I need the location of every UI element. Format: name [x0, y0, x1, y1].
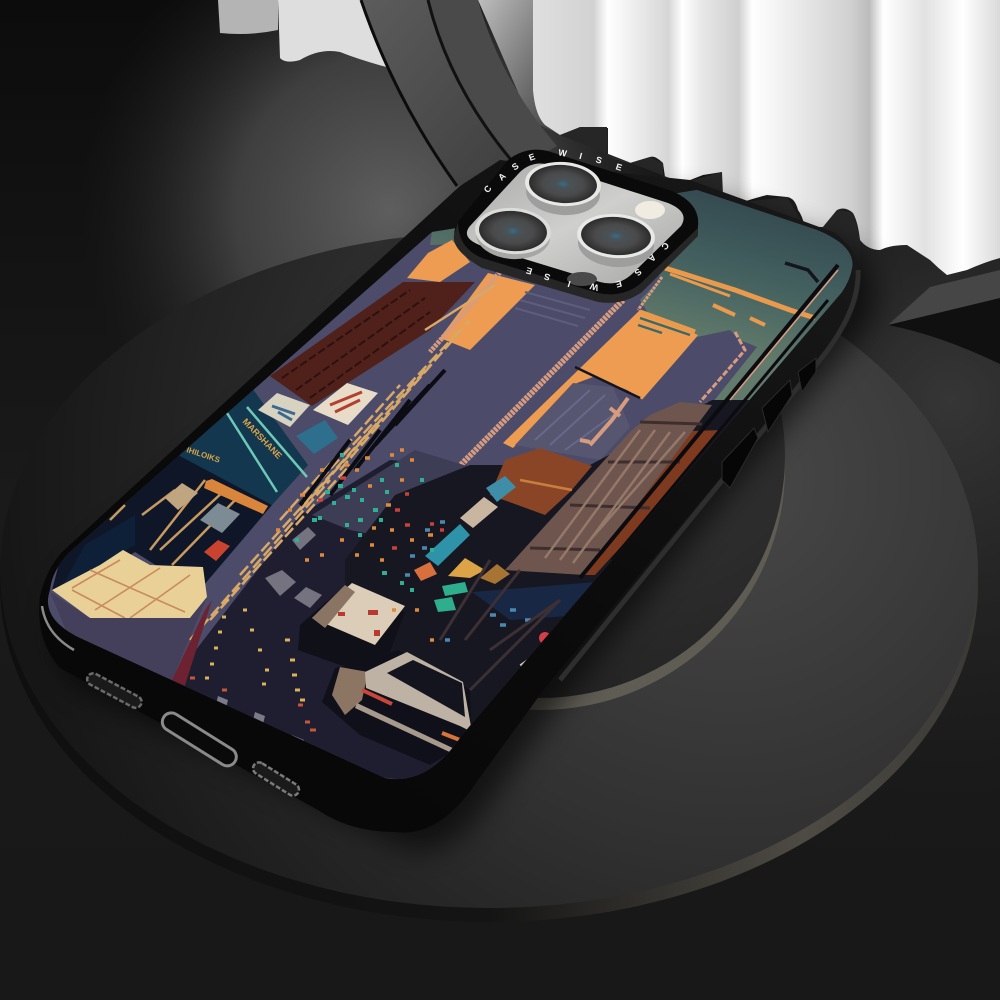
brand text: top: C — [482, 183, 494, 195]
bokeh lights: orange — [276, 450, 434, 640]
navy awning — [472, 582, 596, 620]
sedan — [322, 650, 472, 765]
brand text: top: E — [527, 151, 537, 163]
storefront — [52, 452, 272, 592]
brand text: top: E — [615, 278, 623, 290]
brand text: top: I — [578, 151, 583, 161]
stand foot right — [888, 270, 1000, 364]
orange sky slices — [407, 240, 698, 448]
sensor — [567, 272, 597, 286]
figure — [64, 515, 135, 584]
tower facade lines — [515, 292, 590, 326]
street — [184, 460, 468, 779]
brand text: top: W — [588, 281, 600, 293]
pink tower stripes — [430, 272, 662, 476]
blue store facade — [176, 388, 308, 505]
road markers — [205, 600, 305, 700]
bottom ports — [85, 671, 301, 798]
case artwork: pixel city street — [48, 190, 852, 780]
brand text: top: A — [496, 171, 508, 183]
store names: MARSHANE — [241, 416, 284, 461]
lens: right — [576, 211, 656, 270]
curtain: small left panel — [218, 0, 390, 68]
brand text: top: S — [510, 161, 521, 172]
brand text: top: A — [646, 252, 658, 264]
camera surround — [454, 147, 698, 303]
phone shadow — [53, 196, 874, 851]
van — [298, 583, 405, 665]
lens: left — [473, 205, 553, 262]
small tower — [515, 383, 630, 460]
brand text: top: E — [525, 265, 533, 277]
distant cars — [265, 527, 322, 608]
dark scallops behind phone — [560, 127, 860, 300]
rust building — [490, 448, 592, 515]
tan shop frames — [110, 480, 240, 565]
curtain: main right panel — [478, 0, 1000, 275]
bokeh lights: red — [318, 478, 444, 548]
flash — [635, 201, 665, 219]
brick building — [270, 282, 475, 406]
street lamp — [785, 263, 818, 282]
poles — [580, 265, 838, 578]
small disk — [295, 214, 785, 710]
lamp on tower — [575, 367, 640, 398]
paper signs — [258, 383, 378, 454]
right side buildings — [345, 400, 750, 724]
phone case body — [39, 160, 860, 833]
brand text: top: S — [543, 271, 551, 283]
brand text: top: S — [595, 154, 603, 166]
orange clouds — [640, 268, 815, 332]
bokeh lights: blue — [405, 522, 531, 640]
dark building lines — [440, 560, 570, 690]
brand text: top: C — [659, 240, 671, 252]
brand text: top: W — [557, 147, 568, 159]
brand text: top: I — [566, 279, 572, 289]
orange shop sign — [204, 479, 268, 514]
right tower — [640, 330, 757, 402]
sky — [430, 190, 852, 414]
side buttons — [722, 358, 816, 488]
rust block beyond pole — [585, 430, 722, 575]
bokeh lights: teal — [295, 455, 434, 590]
arc stand behind phone — [361, 0, 557, 186]
pavement — [52, 550, 207, 618]
perspective light streaks — [190, 320, 470, 640]
brand text: top — [482, 147, 671, 293]
shop signs right side — [414, 476, 551, 674]
towers base — [48, 190, 852, 780]
lens: top — [524, 159, 602, 218]
case edge highlight — [42, 606, 74, 650]
shop windows — [165, 483, 198, 510]
sidewalk shadow — [50, 592, 207, 680]
camera glass — [467, 164, 684, 283]
case artwork: pixel city street: IHILOIKS — [185, 445, 222, 465]
tan building — [505, 402, 712, 575]
brand text: top: S — [632, 267, 644, 278]
large disk — [0, 232, 978, 922]
brand text: top: E — [615, 161, 623, 173]
